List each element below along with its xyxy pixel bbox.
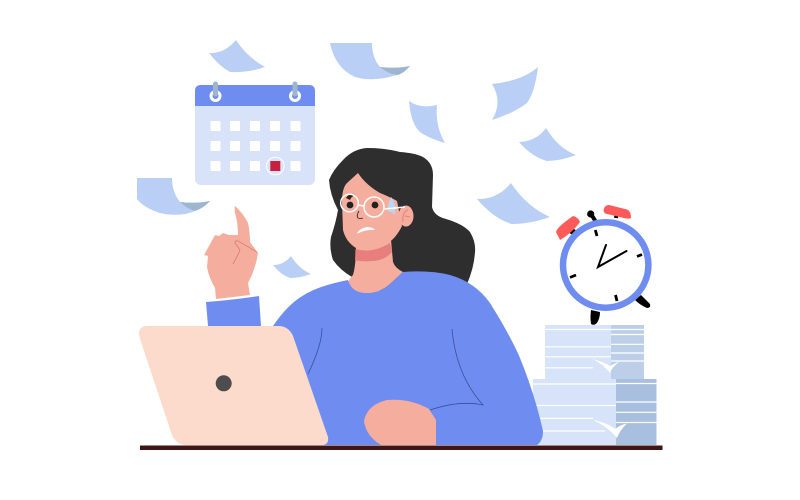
calendar bbox=[195, 84, 315, 185]
sweater fold lines bbox=[308, 328, 483, 410]
upper stack bbox=[545, 325, 644, 379]
laptop bbox=[139, 326, 328, 445]
flying paper: centre bbox=[409, 101, 445, 143]
clock bells bbox=[556, 205, 631, 240]
stacked papers bbox=[533, 325, 656, 445]
marked date bbox=[266, 157, 284, 175]
desk bbox=[140, 446, 662, 450]
nose bbox=[357, 211, 363, 218]
forearm hand bbox=[364, 400, 436, 445]
eyes bbox=[347, 202, 378, 208]
calendar rings bbox=[211, 84, 300, 100]
raised hand bbox=[204, 206, 258, 299]
torso bbox=[273, 271, 543, 445]
lower stack bbox=[533, 379, 656, 445]
calendar header bbox=[195, 85, 315, 106]
neck bbox=[348, 240, 403, 293]
neck shadow bbox=[355, 243, 392, 261]
clock hands bbox=[598, 245, 626, 267]
flying paper: lower right bbox=[477, 183, 550, 224]
clock face bbox=[563, 222, 648, 308]
mouth bbox=[356, 227, 375, 234]
laptop logo bbox=[216, 375, 232, 391]
face bbox=[342, 173, 402, 250]
flying paper: small bbox=[273, 256, 311, 278]
sleeve cuff bbox=[206, 296, 261, 326]
tear bbox=[388, 197, 396, 212]
woman bbox=[204, 173, 543, 445]
clock ticks bbox=[570, 230, 642, 301]
flying paper: top curled bbox=[330, 43, 410, 79]
calendar body bbox=[195, 85, 315, 185]
calendar day squares bbox=[210, 121, 300, 171]
alarm clock bbox=[556, 205, 650, 325]
clock feet bbox=[590, 295, 650, 325]
flying paper: left curled bbox=[137, 178, 210, 215]
flying paper: top left bbox=[209, 40, 265, 72]
flying paper: upper right bbox=[492, 67, 538, 120]
hair bbox=[329, 148, 475, 300]
eyebrow bbox=[346, 194, 355, 200]
flying paper: right bbox=[519, 128, 576, 161]
ear bbox=[398, 206, 414, 226]
glasses bbox=[341, 194, 405, 217]
